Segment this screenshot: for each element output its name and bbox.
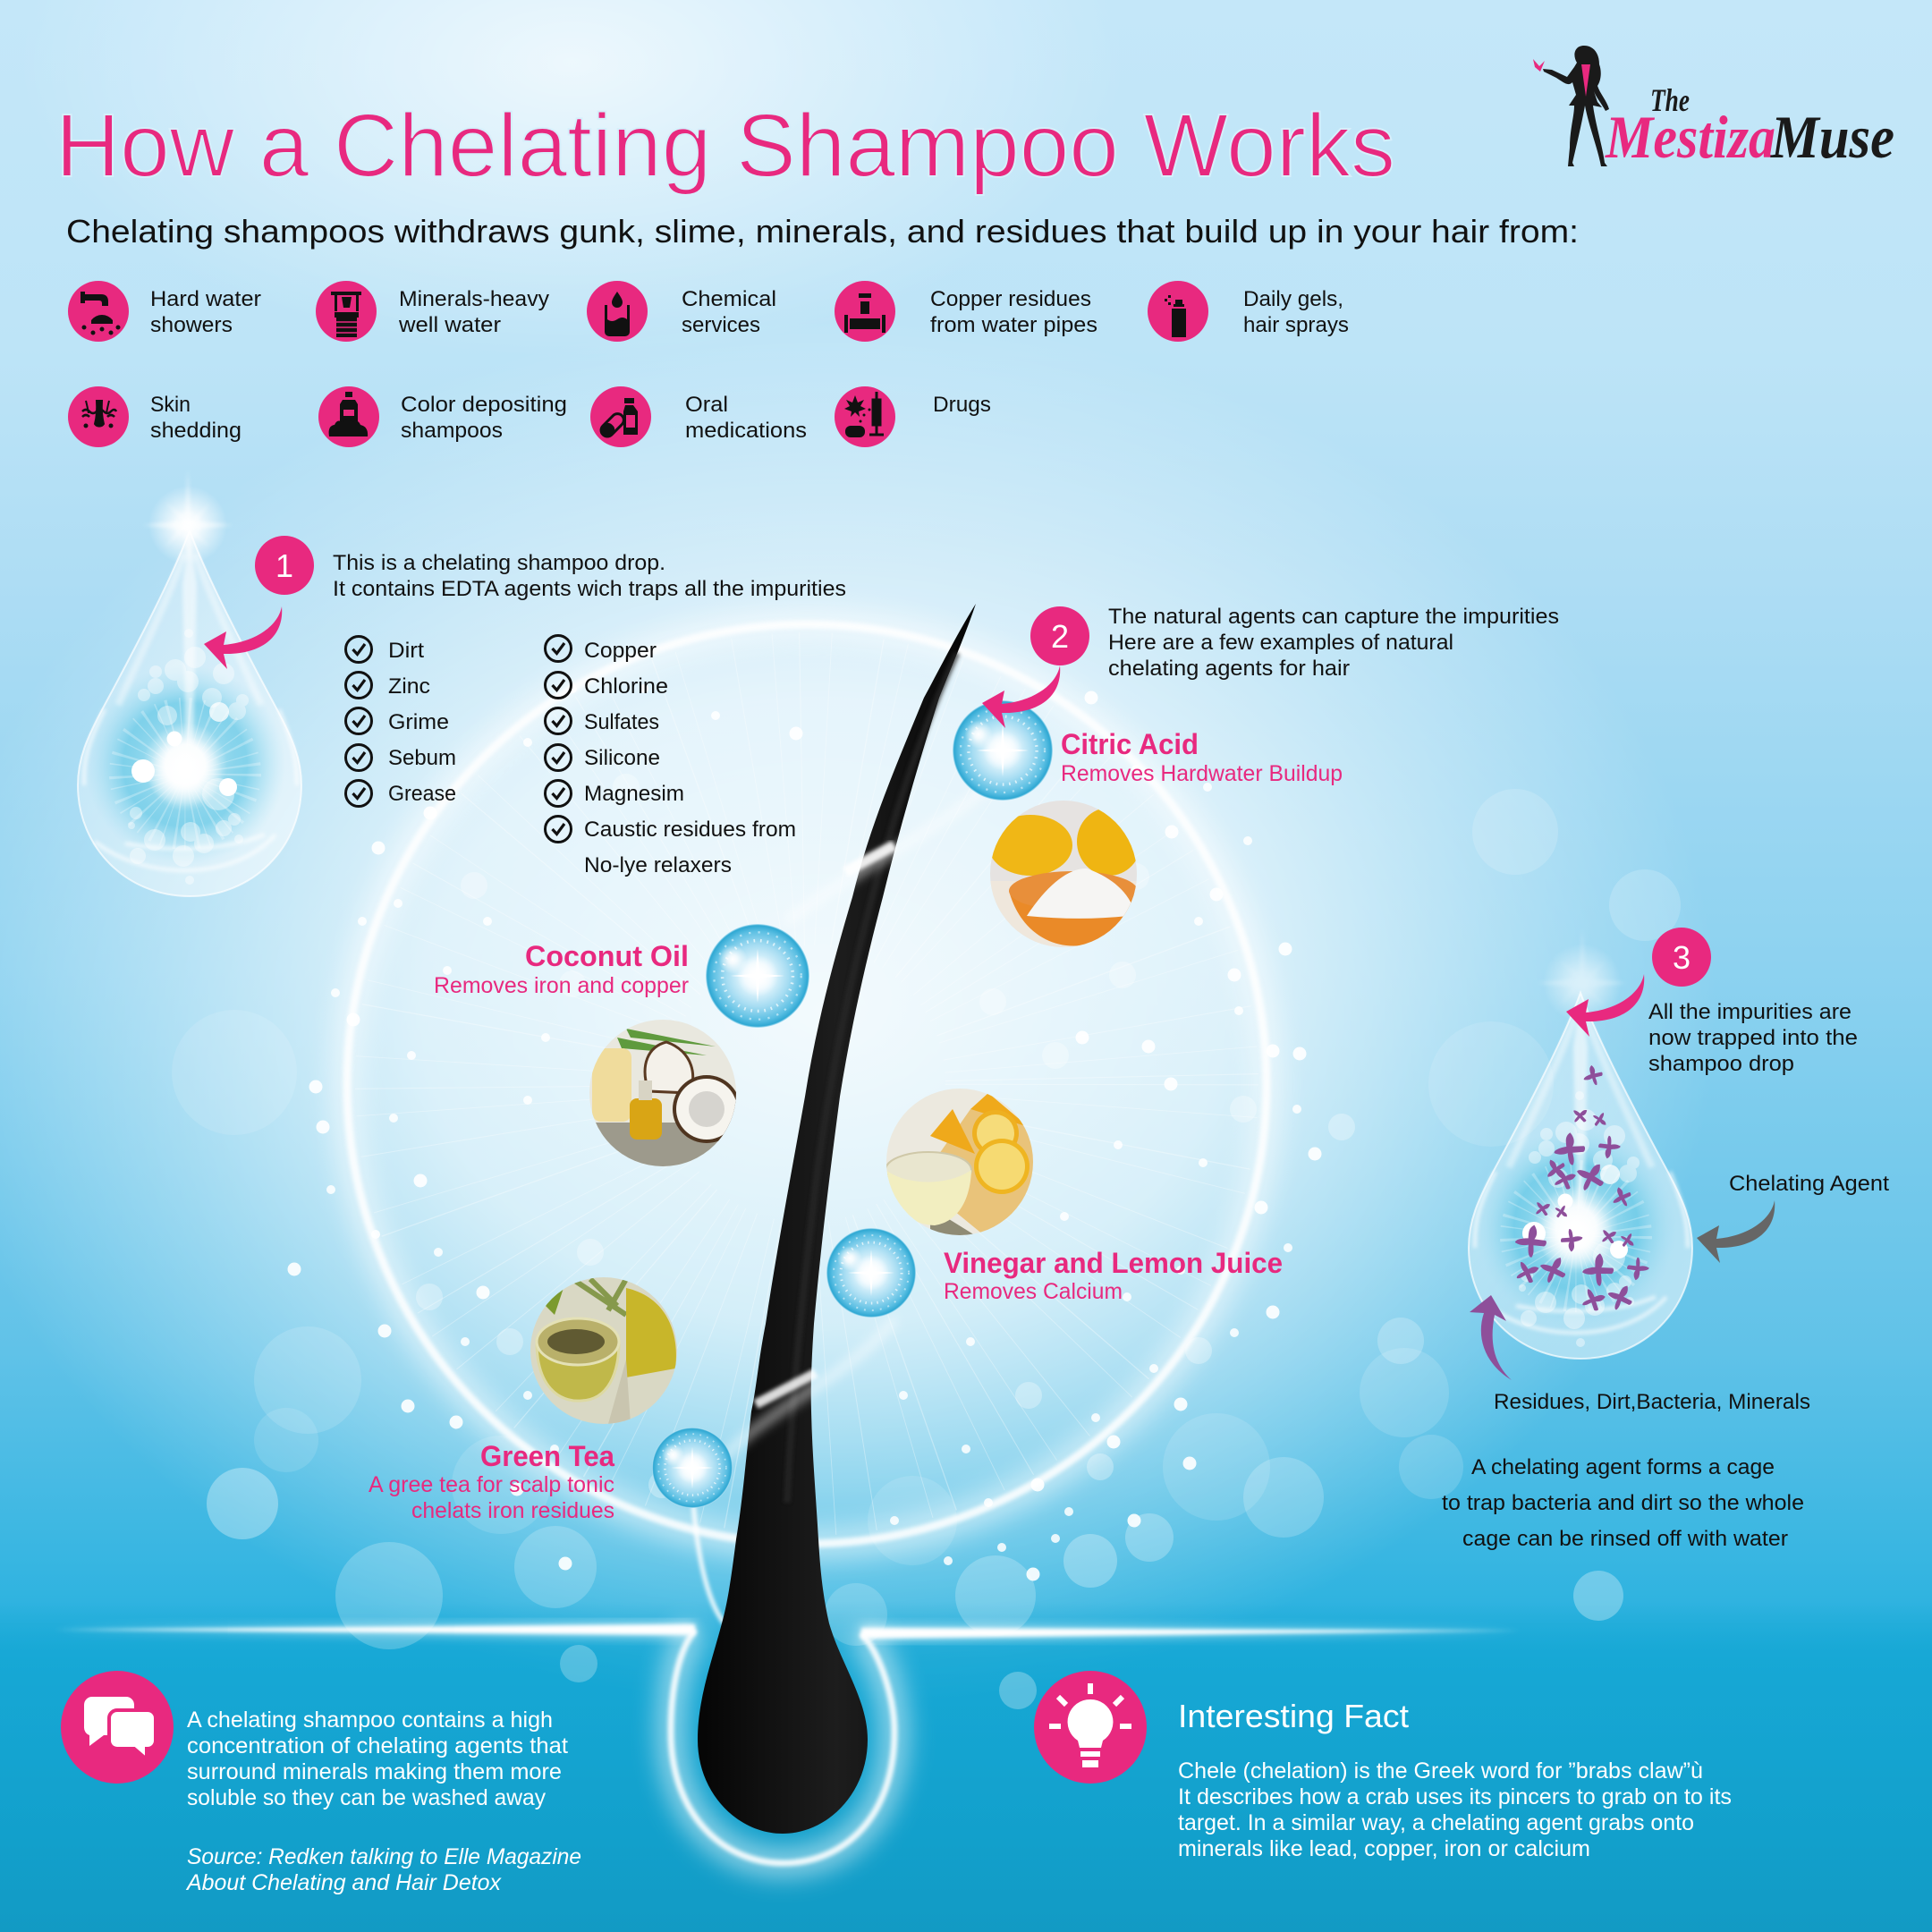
source: chemical services: Chemical — [682, 287, 776, 311]
green tea label: A gree tea for scalp tonic — [369, 1472, 614, 1497]
vinegar label: Vinegar and Lemon Juice — [944, 1247, 1283, 1279]
coconut oil label: Coconut Oil — [525, 940, 689, 972]
source: colour shampoos: Color depositing — [401, 393, 567, 417]
coconut oil label — [434, 940, 689, 998]
icon: light bulb — [1034, 1671, 1147, 1784]
source: hard water showers — [68, 281, 261, 342]
source: oral medications: medications — [685, 419, 807, 443]
logo: Muse — [1770, 103, 1894, 171]
icon: speech bubbles — [61, 1671, 174, 1784]
step 1 shampoo drop — [78, 470, 301, 896]
impurity checklist right: Magnesim — [584, 782, 684, 806]
residues callout — [1470, 1295, 1810, 1414]
source: copper pipes: from water pipes — [930, 313, 1097, 337]
impurity checklist right: Caustic residues from — [584, 818, 796, 842]
source: well water — [316, 281, 550, 342]
source: well water: well water — [398, 313, 501, 337]
source: oral medications — [590, 386, 807, 447]
source: drugs: Drugs — [933, 393, 991, 417]
green tea label: chelats iron residues — [411, 1498, 614, 1523]
interesting fact: Interesting Fact — [1178, 1698, 1409, 1734]
vinegar label — [944, 1247, 1283, 1304]
residues callout: Residues, Dirt,Bacteria, Minerals — [1494, 1390, 1810, 1414]
photo: coconut and oil — [589, 1020, 741, 1167]
impurity checklist right: No-lye relaxers — [584, 853, 732, 877]
impurity checklist right: Copper — [584, 639, 657, 663]
step 1 badge and text — [204, 536, 846, 669]
cage explanation: A chelating agent forms a cage — [1471, 1455, 1775, 1479]
photo: vinegar and lemon — [886, 1089, 1033, 1235]
impurity checklist left: Grease — [388, 782, 456, 806]
scalp line and follicle — [54, 1503, 1521, 1863]
step 2 badge and text: Here are a few examples of natural — [1108, 631, 1453, 655]
source: well water: Minerals-heavy — [399, 287, 550, 311]
step 3 badge and text: 3 — [1673, 939, 1690, 976]
impurity checklist right: Chlorine — [584, 674, 668, 699]
impurity checklist right: Sulfates — [584, 710, 659, 734]
chelating summary text: A chelating shampoo contains a high — [187, 1707, 553, 1733]
interesting fact: minerals like lead, copper, iron or calcium — [1178, 1836, 1590, 1861]
source: gels and sprays — [1148, 281, 1349, 342]
source: chemical services — [587, 281, 776, 342]
source: colour shampoos: shampoos — [401, 419, 503, 443]
source: copper pipes: Copper residues — [930, 287, 1091, 311]
vinegar bubble — [826, 1228, 916, 1318]
green tea label — [369, 1440, 614, 1523]
source credit: Source: Redken talking to Elle Magazine — [187, 1844, 581, 1869]
subtitle: Chelating shampoos withdraws gunk, slime, minerals, and residues that build up in your hair from: — [66, 213, 1579, 250]
source: skin shedding — [68, 386, 242, 447]
vinegar label: Removes Calcium — [944, 1279, 1123, 1304]
chelating summary text: soluble so they can be washed away — [187, 1785, 546, 1810]
impurity checklist right — [546, 635, 796, 877]
logo — [1533, 46, 1894, 171]
source credit: About Chelating and Hair Detox — [185, 1870, 502, 1895]
step 3 badge and text: shampoo drop — [1648, 1052, 1794, 1076]
source credit — [185, 1844, 581, 1895]
step 2 badge and text: 2 — [1051, 618, 1069, 655]
interesting fact: It describes how a crab uses its pincers to grab on to its — [1178, 1784, 1732, 1809]
source: skin shedding: Skin — [150, 393, 191, 417]
cage explanation: cage can be rinsed off with water — [1462, 1527, 1788, 1551]
chelating agent callout — [1697, 1172, 1889, 1263]
impurity checklist left: Sebum — [388, 746, 456, 770]
impurity checklist left: Dirt — [388, 639, 424, 663]
source: chemical services: services — [682, 313, 760, 337]
step 3 badge and text: now trapped into the — [1648, 1026, 1858, 1050]
scattered light dots — [294, 689, 1342, 1574]
photo: green tea — [530, 1277, 677, 1424]
step 3 badge and text: All the impurities are — [1648, 1000, 1852, 1024]
interesting fact: Chele (chelation) is the Greek word for ”brabs claw”ù — [1178, 1758, 1703, 1784]
impurity checklist left: Zinc — [388, 674, 430, 699]
title: How a Chelating Shampoo Works — [55, 96, 1395, 196]
source: drugs — [835, 386, 991, 447]
soft bokeh circles — [172, 789, 1681, 1709]
green tea bubble — [652, 1428, 733, 1508]
logo: Mestiza — [1605, 103, 1775, 171]
source: oral medications: Oral — [685, 393, 728, 417]
source: colour shampoos — [318, 386, 567, 447]
citric acid label: Citric Acid — [1061, 728, 1199, 760]
citric acid bubble — [953, 700, 1053, 801]
glowing ring with rays — [347, 624, 1267, 1544]
step 3 drop with impurities — [1469, 928, 1692, 1359]
coconut oil bubble — [706, 924, 809, 1028]
cage explanation: to trap bacteria and dirt so the whole — [1442, 1491, 1804, 1515]
impurity checklist left: Grime — [388, 710, 449, 734]
chelating summary text: surround minerals making them more — [187, 1759, 562, 1784]
source: gels and sprays: hair sprays — [1243, 313, 1349, 337]
green tea label: Green Tea — [480, 1440, 614, 1472]
source: hard water showers: Hard water — [150, 287, 261, 311]
impurity checklist right: Silicone — [584, 746, 660, 770]
photo: lemons and citric acid — [988, 801, 1141, 948]
interesting fact: target. In a similar way, a chelating agent grabs onto — [1178, 1810, 1694, 1835]
chelating agent callout: Chelating Agent — [1729, 1172, 1889, 1196]
source: gels and sprays: Daily gels, — [1243, 287, 1343, 311]
logo: The — [1650, 82, 1690, 118]
citric acid label — [1061, 728, 1343, 786]
hair light streaks — [724, 783, 993, 1458]
step 1 badge and text: It contains EDTA agents wich traps all the impurities — [333, 577, 846, 601]
step 2 badge and text — [1030, 605, 1559, 681]
chelating summary text — [187, 1707, 568, 1810]
cage explanation — [1442, 1455, 1804, 1551]
hair strand — [698, 604, 976, 1834]
step 2 arrow — [982, 665, 1060, 728]
interesting fact — [1178, 1698, 1732, 1861]
source: copper pipes — [835, 281, 1097, 342]
step 3 badge and text — [1566, 928, 1858, 1076]
source: hard water showers: showers — [150, 313, 233, 337]
step 2 badge and text: The natural agents can capture the impurities — [1108, 605, 1559, 629]
citric acid label: Removes Hardwater Buildup — [1061, 761, 1343, 786]
step 2 badge and text: chelating agents for hair — [1108, 657, 1350, 681]
chelating summary text: concentration of chelating agents that — [187, 1733, 568, 1758]
step 1 badge and text: This is a chelating shampoo drop. — [333, 551, 665, 575]
impurity checklist left — [345, 637, 456, 807]
step 1 badge and text: 1 — [275, 547, 293, 584]
coconut oil label: Removes iron and copper — [434, 973, 689, 998]
source: skin shedding: shedding — [150, 419, 242, 443]
